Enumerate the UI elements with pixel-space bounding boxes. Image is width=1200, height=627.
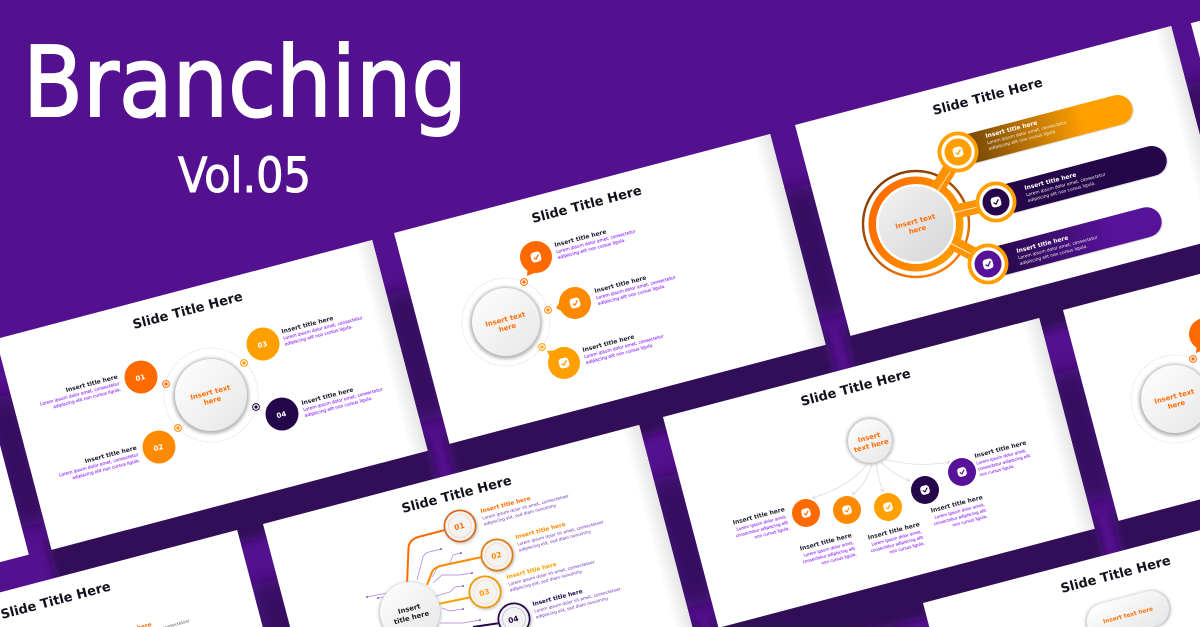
bubble 2: [556, 287, 591, 319]
panel: right slide, partly cropped: [1063, 211, 1200, 521]
slide edge: far top right: [1191, 0, 1200, 234]
node 04: [266, 398, 298, 430]
text block 2: Insert title here: [594, 275, 647, 295]
text block 5: Insert title here: [974, 440, 1027, 460]
text block 04: Lorem ipsum dolor sit amet, consectetuer: [534, 586, 622, 615]
branch line end dots: [366, 548, 481, 621]
pill text 1: Insert title here: [985, 120, 1038, 140]
text block 02: Lorem ipsum dolor amet, consectetur: [59, 452, 139, 479]
text block 04: adipiscing elit, sed diam nonummy: [535, 596, 609, 621]
panel: bottom right slide, cropped: [923, 504, 1200, 627]
text block 2: adipiscing elit non cursus ligula.: [597, 283, 666, 307]
central circle: Insert: [397, 602, 422, 616]
text block 01: Insert title here: [65, 374, 119, 394]
central hub: [1131, 355, 1200, 443]
text block 1: consectetur adipiscing elit: [735, 520, 789, 538]
node 04: 04: [276, 410, 287, 420]
panel: slide with arrows fan: [663, 318, 1095, 627]
text block 04: adipiscing elit non cursus ligula.: [304, 395, 373, 419]
central pill: Insert text here: [1103, 607, 1154, 625]
text block 03: Insert title here: [281, 315, 334, 335]
hub centre: [876, 184, 956, 264]
numbered node 04: 04: [507, 614, 520, 625]
slide title: Slide Title Here: [799, 366, 913, 410]
heading: Branching: Branching: [23, 26, 467, 139]
central hub: here: [498, 322, 517, 334]
slide title: Slide Title Here: [400, 473, 514, 517]
slide background: [263, 425, 695, 627]
pill 2: [992, 142, 1171, 217]
text block 2: consectetur adipiscing elit: [802, 546, 856, 564]
text block 3: consectetur adipiscing elit: [870, 535, 924, 553]
text block 1: Lorem ipsum dolor amet,: [736, 514, 787, 532]
numbered node 04: [498, 602, 532, 627]
text block 01: adipiscing elit non cursus ligula.: [53, 387, 122, 410]
central hub: [164, 348, 258, 442]
text block 1: non cursus ligula.: [754, 526, 790, 540]
check node 4: [911, 476, 939, 504]
text block 1: Insert title here: [554, 229, 607, 249]
thick branch lines: [407, 530, 500, 627]
text block 01: [38, 374, 122, 413]
text block 01: Insert title here: [480, 496, 532, 515]
text block 03: Lorem ipsum dolor amet, consectetur: [283, 315, 363, 342]
panel: bottom left slide, cropped: [0, 530, 293, 627]
text block 03: [281, 308, 365, 348]
text block 03: adipiscing elit, sed diam nonummy: [509, 569, 583, 594]
pill text 1: adipiscing elit non cursus ligula.: [988, 128, 1057, 152]
numbered node 02: 02: [490, 550, 503, 561]
central circle: [379, 582, 441, 627]
text block 3: [582, 326, 666, 366]
central circle: text here: [853, 437, 890, 454]
text block 03: adipiscing elit non cursus ligula.: [284, 324, 353, 348]
node 02: 02: [153, 443, 164, 453]
slide background: [0, 530, 293, 627]
pill text 2: adipiscing elit non cursus ligula.: [1027, 180, 1096, 204]
text block 3: Lorem ipsum dolor amet,: [871, 529, 922, 547]
connector dots: [163, 360, 259, 431]
text block 2: [594, 267, 678, 307]
central hub: here: [1167, 399, 1186, 411]
numbered node 02: [480, 538, 514, 572]
text block 01: Lorem ipsum dolor sit amet, consectetuer: [482, 493, 570, 522]
text block 01: Lorem ipsum dolor amet, consectetur: [40, 381, 120, 408]
text block 5: consectetur adipiscing elit: [977, 453, 1031, 472]
numbered node 01: 01: [453, 521, 466, 532]
text block 3: Insert title here: [867, 521, 921, 542]
node 2: [976, 182, 1016, 222]
pill 1: [954, 91, 1137, 167]
text block 02: Insert title here: [515, 522, 567, 541]
node 03: [246, 328, 280, 360]
slide title: Slide Title Here: [1059, 553, 1173, 597]
slide edge: far left: [0, 344, 29, 627]
text block 4: [930, 494, 988, 532]
slide background: [0, 240, 428, 550]
node 1: [938, 132, 978, 172]
text block 4: non cursus ligula.: [952, 514, 988, 528]
text block 01: adipiscing elit, sed diam nonummy: [483, 503, 557, 528]
text block 3: non cursus ligula.: [889, 541, 925, 555]
fan arrows: [812, 459, 950, 499]
slide title: Slide Title Here: [931, 75, 1045, 119]
text block 2: Lorem ipsum dolor amet, consectetur: [596, 275, 676, 301]
central pill: [1082, 587, 1174, 627]
text block 5: [974, 439, 1033, 477]
slide title: Slide Title Here: [0, 579, 113, 623]
slide background: [795, 26, 1200, 336]
pill 3: [984, 204, 1166, 279]
text block 04: [532, 579, 623, 621]
thin branch lines: [367, 549, 480, 623]
numbered node 01: [444, 510, 478, 544]
node 02: [142, 430, 176, 464]
slide background: [394, 134, 826, 444]
pill text 2: Insert title here: [1024, 172, 1077, 192]
text block 02: [515, 512, 606, 554]
text block 02: Lorem ipsum dolor sit amet, consectetuer: [517, 519, 605, 548]
central hub: here: [203, 395, 222, 407]
slide background: [1063, 211, 1200, 521]
central hub: [462, 278, 550, 366]
central hub: Insert text: [484, 310, 527, 329]
text block 02: [57, 445, 141, 484]
text block 3: Insert title here: [582, 334, 635, 354]
text block 03: Lorem ipsum dolor sit amet, consectetuer: [508, 559, 596, 588]
text block 3: [867, 521, 925, 559]
text block 04: Lorem ipsum dolor amet, consectetur: [303, 387, 383, 413]
text block 1: Lorem ipsum dolor amet, consectetur: [556, 229, 636, 255]
text block 2: non cursus ligula.: [821, 552, 857, 566]
cropped slide content: [1131, 318, 1200, 443]
hub centre: Insert text: [894, 212, 937, 231]
pill text 3: [1016, 227, 1100, 267]
check node 2: [833, 496, 861, 524]
hub rings: [863, 171, 969, 277]
pill text 2: [1024, 164, 1108, 204]
cropped bubble: [1189, 318, 1200, 353]
panel: slide with speech bubbles: [394, 134, 826, 444]
central circle: title here: [393, 609, 430, 626]
bubble 1: [520, 241, 552, 276]
text block 03: [506, 552, 597, 594]
pill text 3: Lorem ipsum dolor amet, consectetur: [1018, 235, 1098, 261]
text block 03: Insert title here: [506, 562, 558, 581]
node 01: 01: [135, 373, 146, 383]
text block 02: adipiscing elit, sed diam nonummy: [518, 529, 592, 554]
text block 02: Insert title here: [84, 445, 138, 465]
text block 4: Lorem ipsum dolor amet,: [934, 502, 985, 520]
slide title: Slide Title Here: [530, 183, 644, 227]
node 03: 03: [257, 340, 268, 350]
text block 01: [480, 486, 571, 528]
central circle: Insert: [857, 431, 882, 444]
numbered node 03: [468, 576, 502, 610]
text block 04: Insert title here: [301, 387, 354, 407]
pill text 1: [985, 112, 1069, 152]
pill text 2: Lorem ipsum dolor amet, consectetur: [1026, 172, 1106, 198]
text block 04: Insert title here: [532, 589, 584, 608]
check node 3: [874, 493, 902, 521]
connector dot: [1190, 356, 1196, 362]
text block 1: adipiscing elit non cursus ligula.: [557, 237, 626, 261]
slide background: [923, 504, 1200, 627]
subheading: Vol.05: Vol.05: [178, 148, 311, 204]
pill text 3: Insert title here: [1016, 235, 1069, 255]
slide background: [663, 318, 1095, 627]
text block 1: Insert title here: [732, 506, 786, 527]
central hub: Insert text: [1153, 387, 1196, 406]
slide title: Slide Title Here: [131, 289, 245, 333]
check node 1: [792, 499, 820, 527]
hub centre: here: [908, 224, 927, 236]
text block 5: Lorem ipsum dolor amet,: [976, 448, 1027, 466]
text block 5: non cursus ligula.: [979, 463, 1015, 477]
panel: slide with pills and orange hub: [795, 26, 1200, 336]
panel: slide with four numbered circles: [0, 240, 428, 550]
node 01: [124, 360, 158, 394]
text block 02: adipiscing elit non cursus ligula.: [72, 458, 141, 481]
connector dots: [521, 279, 551, 350]
text block 3: Lorem ipsum dolor amet, consectetur: [584, 334, 664, 360]
text block 4: consectetur adipiscing elit: [933, 508, 987, 526]
text block 3: adipiscing elit non cursus ligula.: [585, 342, 654, 366]
central hub: Insert text: [189, 383, 232, 402]
text block 2: Lorem ipsum dolor amet,: [803, 540, 854, 558]
check node 5: [948, 458, 976, 486]
text block 1: [554, 221, 638, 261]
numbered node 03: 03: [478, 587, 491, 598]
pill text 1: Lorem ipsum dolor amet, consectetur: [987, 120, 1067, 146]
central circle: [846, 418, 894, 464]
text block 1: [732, 506, 790, 544]
node 3: [968, 244, 1008, 284]
pill text 3: adipiscing elit non cursus ligula.: [1019, 243, 1088, 267]
text block 4: Insert title here: [930, 494, 984, 515]
hub connectors: [932, 165, 985, 255]
bubble 3: [547, 347, 580, 379]
text block 2: Insert title here: [799, 532, 853, 553]
panel: slide with circuit branches: [263, 425, 695, 627]
text block 04: [301, 379, 385, 419]
text block 2: [799, 532, 857, 570]
